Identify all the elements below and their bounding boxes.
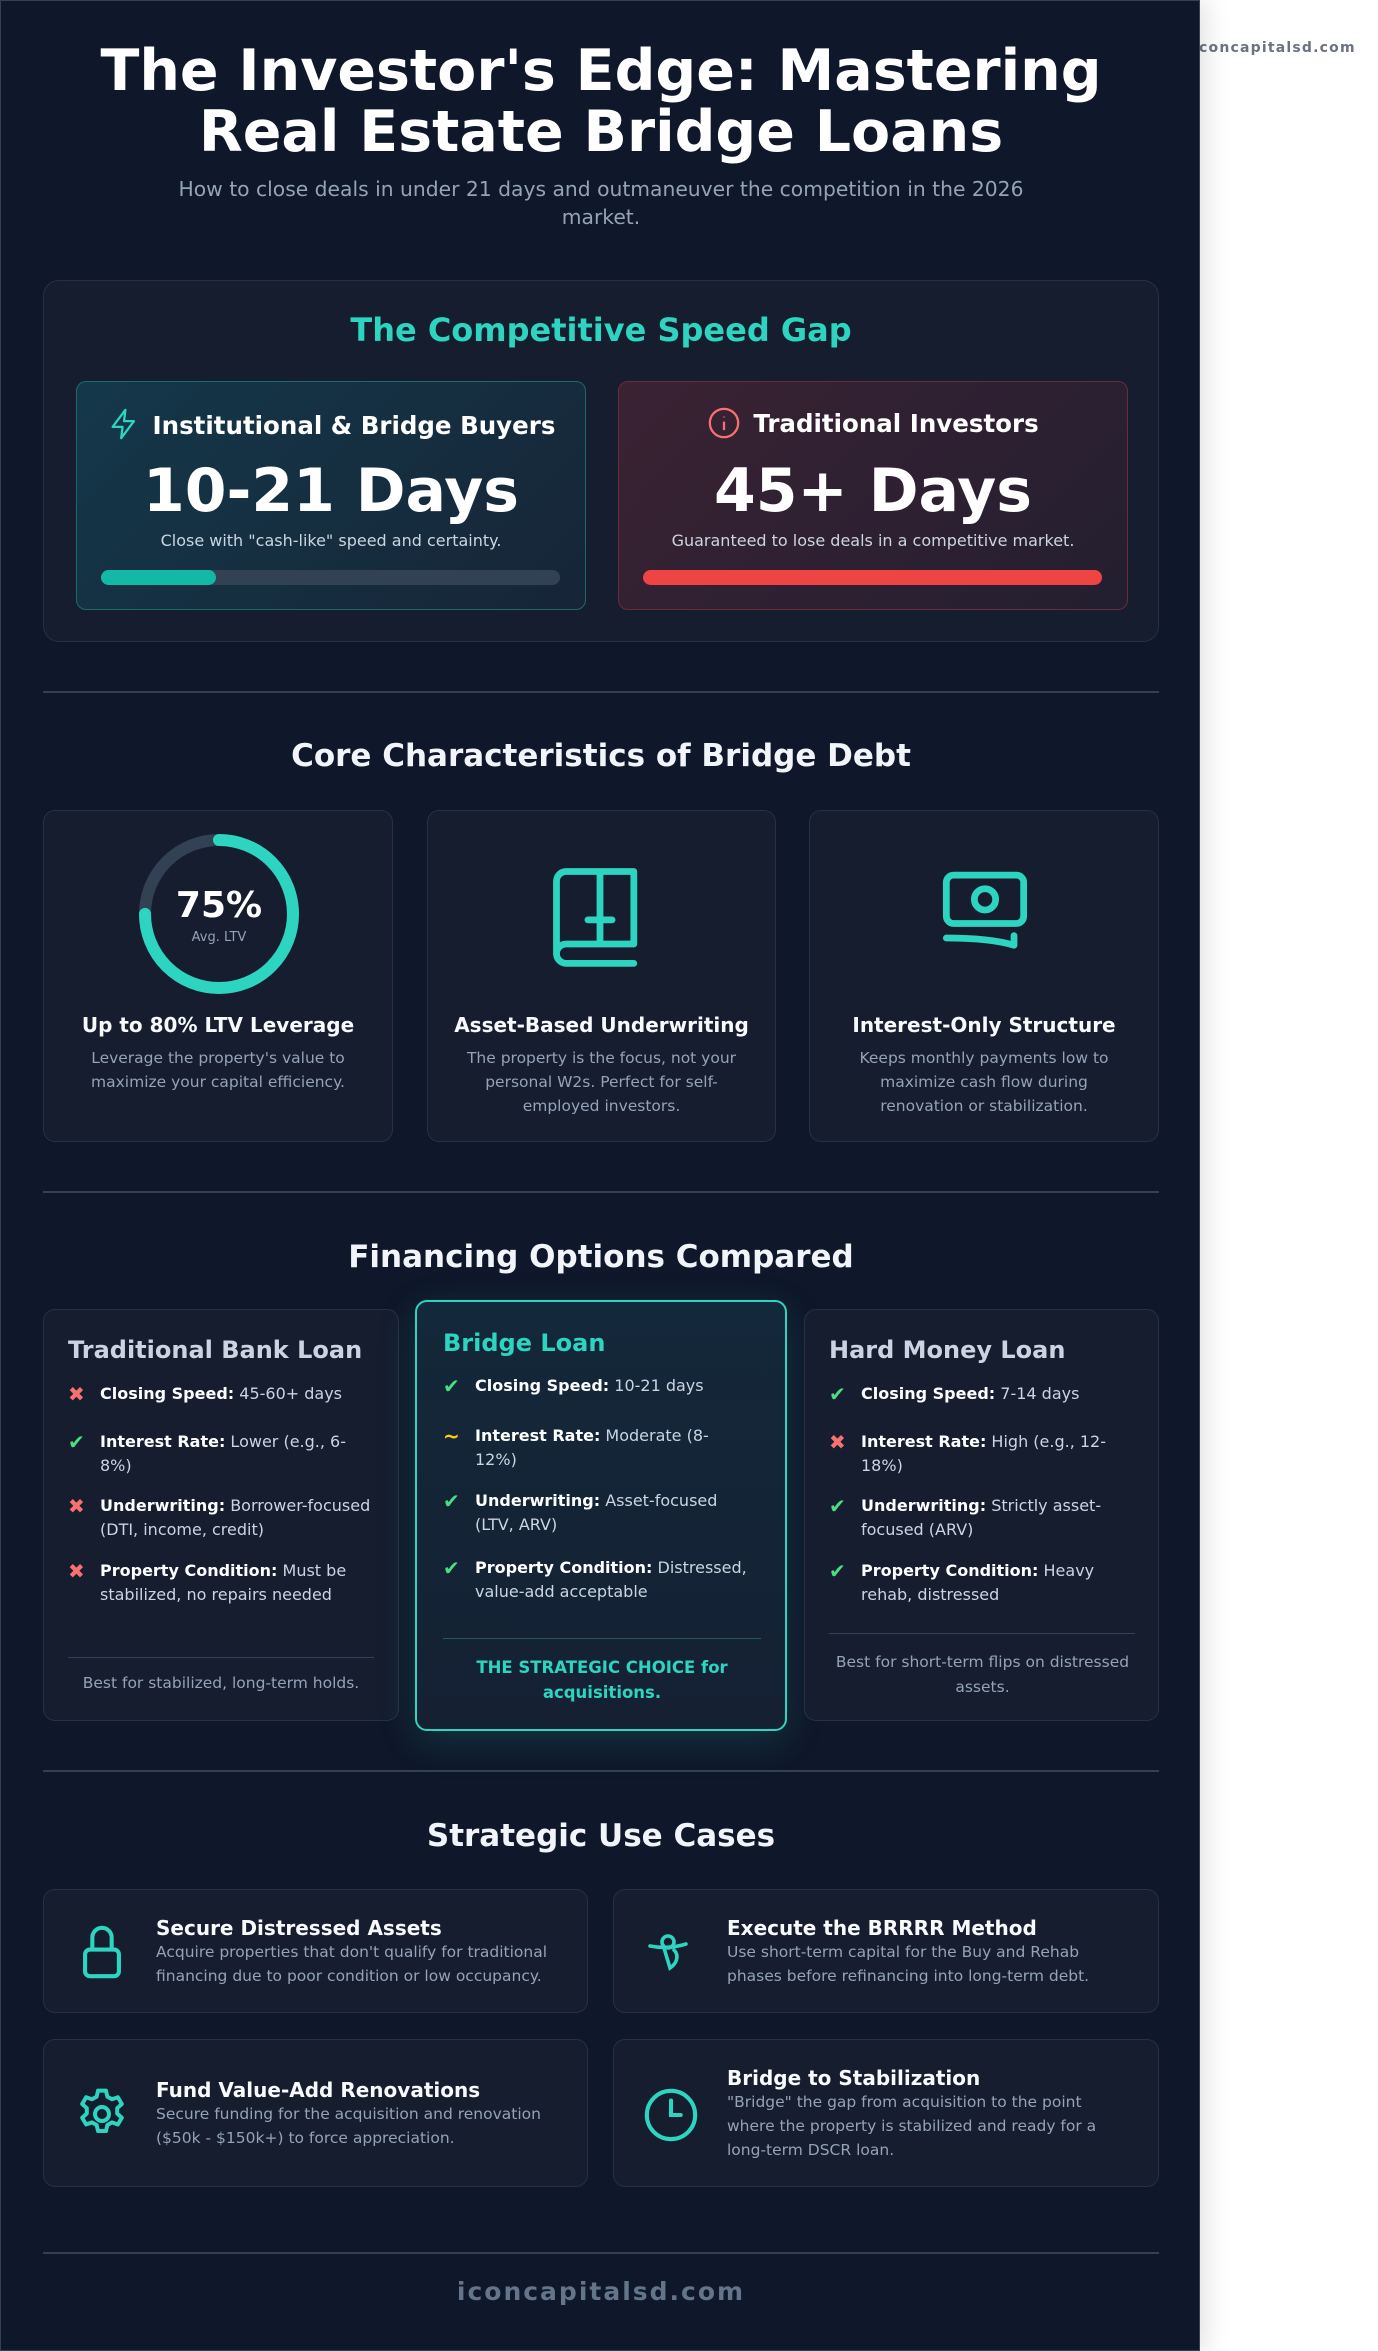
watermark top: iconcapitalsd.com — [1193, 40, 1356, 56]
card: bridge loan highlight — [415, 1300, 787, 1731]
items: Interest Rate: High (e.g., 12- — [861, 1432, 1106, 1451]
card: interest-only — [809, 810, 1159, 1142]
items: ✖ — [68, 1559, 85, 1583]
title: Bridge Loan — [443, 1329, 605, 1357]
items: 12%) — [475, 1450, 517, 1469]
desc: The property is the focus, not your personal W2s. Perfect for self-employed investors. — [467, 1049, 736, 1115]
text: Secure funding for the acquisition and renovation — [156, 2105, 541, 2123]
items: ✔ — [829, 1494, 846, 1518]
card: traditional — [618, 381, 1128, 610]
icon: lock — [83, 1926, 121, 1978]
subtitle: How to close deals in under 21 days and outmaneuver the competition in the 2026 market. — [178, 177, 1023, 229]
items: Property Condition: Must be — [100, 1561, 346, 1580]
items: ✔ — [443, 1556, 460, 1580]
text — [156, 1916, 547, 1985]
items: focused (ARV) — [861, 1520, 973, 1539]
donut chart: Avg. LTV — [192, 930, 246, 945]
use case: distressed — [43, 1889, 588, 2013]
title: Up to 80% LTV Leverage — [82, 1013, 354, 1037]
icon: book — [553, 868, 638, 967]
text — [727, 1916, 1089, 1985]
header with info icon: Traditional Investors — [753, 409, 1039, 438]
text: financing due to poor condition or low occupancy. — [156, 1967, 542, 1985]
number: 45+ Days — [714, 456, 1032, 526]
items: Property Condition: Distressed, — [475, 1558, 747, 1577]
items: Closing Speed: 45-60+ days — [100, 1384, 342, 1403]
items — [68, 1382, 370, 1604]
card: bridge loan highlight: value-add acceptable — [475, 1582, 648, 1601]
items: Underwriting: Borrower-focused — [100, 1496, 370, 1515]
icon: cash — [942, 872, 1028, 949]
caption: Guaranteed to lose deals in a competitive market. — [672, 531, 1074, 550]
items: Underwriting: Asset-focused — [475, 1491, 717, 1510]
card: bank loan — [43, 1309, 399, 1721]
text: Fund Value-Add Renovations — [156, 2078, 480, 2102]
title: The Investor's Edge: Mastering — [100, 38, 1102, 104]
items: ✖ — [68, 1382, 85, 1406]
items: Closing Speed: 10-21 days — [475, 1376, 704, 1395]
text: Bridge to Stabilization — [727, 2066, 980, 2090]
heading: use cases: Strategic Use Cases — [427, 1818, 775, 1854]
icon: clock — [644, 2088, 698, 2142]
bar — [101, 570, 560, 585]
items: Property Condition: Heavy — [861, 1561, 1094, 1580]
items: 18%) — [861, 1456, 903, 1475]
text: Acquire properties that don't qualify for traditional — [156, 1943, 547, 1961]
items: ✖ — [68, 1494, 85, 1518]
items — [443, 1374, 747, 1601]
number: 10-21 Days — [143, 456, 519, 526]
items: ✔ — [443, 1374, 460, 1398]
caption: Close with "cash-like" speed and certainty. — [161, 531, 501, 550]
items — [829, 1382, 1106, 1604]
footer note: Best for stabilized, long-term holds. — [83, 1674, 359, 1692]
title: Asset-Based Underwriting — [454, 1013, 749, 1037]
text: Execute the BRRRR Method — [727, 1916, 1037, 1940]
footer: iconcapitalsd.com — [457, 2277, 745, 2306]
use case: renovations — [43, 2039, 588, 2187]
items: ~ — [443, 1424, 460, 1448]
donut chart — [139, 834, 299, 994]
items: (LTV, ARV) — [475, 1515, 557, 1534]
items: ✔ — [68, 1430, 85, 1454]
panel: speed gap — [43, 280, 1159, 642]
items: Interest Rate: Lower (e.g., 6- — [100, 1432, 346, 1451]
footer note: Best for short-term flips on distressed assets. — [836, 1653, 1129, 1696]
items: ✔ — [829, 1559, 846, 1583]
text: ($50k - $150k+) to force appreciation. — [156, 2129, 455, 2147]
items: ✖ — [829, 1430, 846, 1454]
text — [156, 2078, 541, 2147]
title — [100, 38, 1102, 165]
desc: Keeps monthly payments low to maximize cash flow during renovation or stabilization. — [859, 1049, 1109, 1115]
items: ✔ — [443, 1489, 460, 1513]
use case: stabilization — [613, 2039, 1159, 2187]
title: Hard Money Loan — [829, 1336, 1065, 1364]
card: institutional — [76, 381, 586, 610]
text: Secure Distressed Assets — [156, 1916, 442, 1940]
text: long-term DSCR loan. — [727, 2141, 894, 2159]
items: Interest Rate: Moderate (8- — [475, 1426, 709, 1445]
header with lightning icon: Institutional & Bridge Buyers — [153, 411, 555, 440]
items: 8%) — [100, 1456, 132, 1475]
text: "Bridge" the gap from acquisition to the point — [727, 2093, 1082, 2111]
title: Traditional Bank Loan — [68, 1336, 362, 1364]
heading: financing options: Financing Options Compared — [348, 1239, 854, 1275]
title: Real Estate Bridge Loans — [199, 99, 1003, 165]
heading: speed gap: The Competitive Speed Gap — [350, 311, 852, 349]
icon: gear — [80, 2088, 124, 2133]
items: Closing Speed: 7-14 days — [861, 1384, 1079, 1403]
card: hard money — [804, 1309, 1159, 1721]
use case: BRRRR — [613, 1889, 1159, 2013]
donut chart: 75% — [176, 885, 262, 926]
text: Use short-term capital for the Buy and Rehab — [727, 1943, 1079, 1961]
desc: Leverage the property's value to maximize your capital efficiency. — [91, 1049, 345, 1091]
text: phases before refinancing into long-term debt. — [727, 1967, 1089, 1985]
items: ✔ — [829, 1382, 846, 1406]
card: hard money: rehab, distressed — [861, 1585, 999, 1604]
title: Interest-Only Structure — [852, 1013, 1116, 1037]
items: Underwriting: Strictly asset- — [861, 1496, 1101, 1515]
text: where the property is stabilized and ready for a — [727, 2117, 1096, 2135]
card: bank loan: stabilized, no repairs needed — [100, 1585, 332, 1604]
items: (DTI, income, credit) — [100, 1520, 264, 1539]
strategic choice: THE STRATEGIC CHOICE for acquisitions. — [476, 1658, 728, 1702]
icon: brrrr — [648, 1934, 688, 1971]
bar — [643, 570, 1102, 585]
text — [727, 2066, 1096, 2159]
card: LTV — [43, 810, 393, 1142]
heading: core characteristics: Core Characteristics of Bridge Debt — [291, 738, 911, 774]
card: asset-based — [427, 810, 776, 1142]
